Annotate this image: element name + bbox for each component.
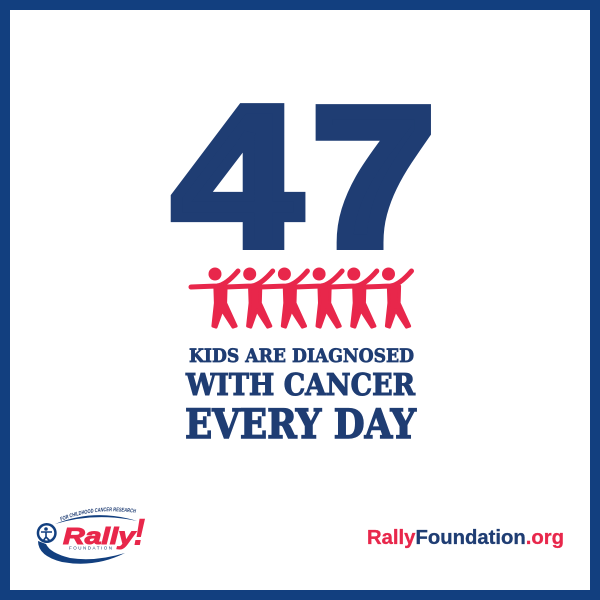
message text: EVERY DAY bbox=[185, 401, 416, 448]
message text bbox=[185, 345, 416, 448]
logo round emblem bbox=[37, 523, 57, 543]
message text: KIDS ARE DIAGNOSED bbox=[189, 345, 414, 367]
message text: WITH CANCER bbox=[185, 368, 416, 403]
big number 47: 4 bbox=[173, 65, 301, 288]
figure 4 bbox=[295, 268, 342, 327]
figure 6 bbox=[364, 268, 412, 327]
logo tagline: FOR CHILDHOOD CANCER RESEARCH bbox=[60, 507, 136, 521]
figure 5 bbox=[330, 268, 377, 327]
Rally Foundation logo bbox=[36, 507, 146, 564]
figure 2 bbox=[226, 268, 273, 327]
logo wordmark: Rally bbox=[63, 523, 137, 549]
logo tagline path bbox=[61, 511, 136, 521]
logo upper arc bbox=[55, 515, 137, 524]
figure 1 bbox=[191, 268, 238, 327]
big number 47: 7 bbox=[315, 72, 432, 283]
figure 3 bbox=[260, 268, 307, 327]
big number 47 bbox=[173, 65, 432, 288]
logo swoosh bbox=[38, 541, 125, 564]
logo foundation label: FOUNDATION bbox=[69, 546, 112, 550]
website url: RallyFoundation.org bbox=[367, 527, 564, 549]
logo exclamation mark: ! bbox=[133, 512, 146, 554]
icon: row of six linked children bbox=[191, 268, 412, 327]
